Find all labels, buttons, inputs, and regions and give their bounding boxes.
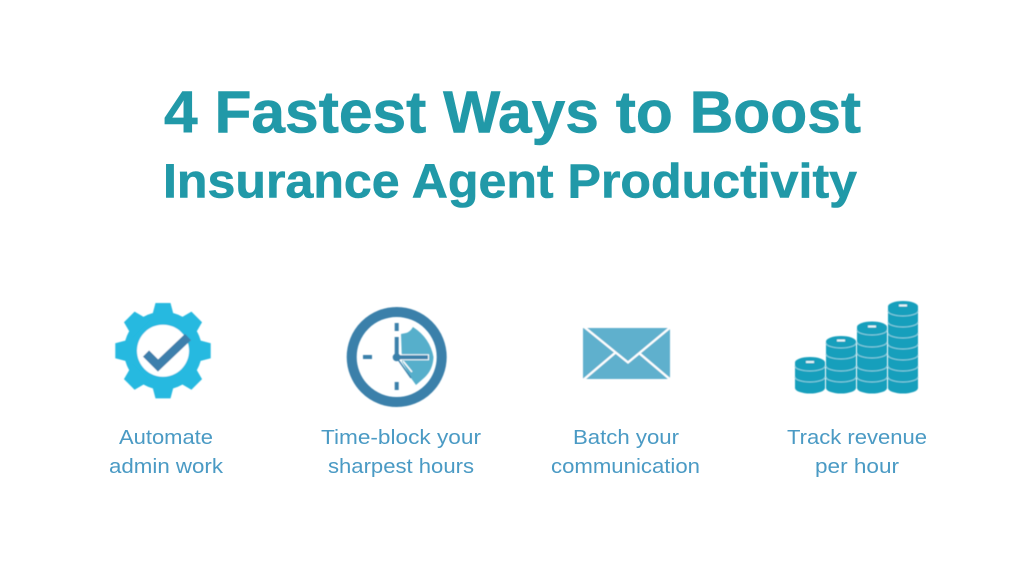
icon: clock: [352, 312, 442, 402]
icon: gear with check mark: [115, 303, 211, 398]
label: track revenue per hour: per hour: [815, 455, 899, 478]
label: automate admin work: [109, 426, 224, 478]
label: time-block your sharpest hours: sharpest hours: [328, 455, 474, 478]
icon: envelope: [582, 326, 672, 381]
label: time-block your sharpest hours: Time-block your: [321, 426, 481, 449]
label: time-block your sharpest hours: [321, 426, 481, 478]
label: automate admin work: Automate: [119, 426, 213, 449]
label: batch your communication: communication: [551, 455, 700, 478]
label: batch your communication: Batch your: [573, 426, 679, 449]
title: 4 Fastest Ways to Boost: [164, 80, 861, 146]
label: track revenue per hour: Track revenue: [787, 426, 927, 449]
label: batch your communication: [551, 426, 700, 478]
title: Insurance Agent Productivity: [163, 156, 857, 208]
icon: coin stacks: [795, 301, 918, 394]
label: track revenue per hour: [787, 426, 927, 478]
title: [163, 80, 861, 208]
label: automate admin work: admin work: [109, 455, 224, 478]
